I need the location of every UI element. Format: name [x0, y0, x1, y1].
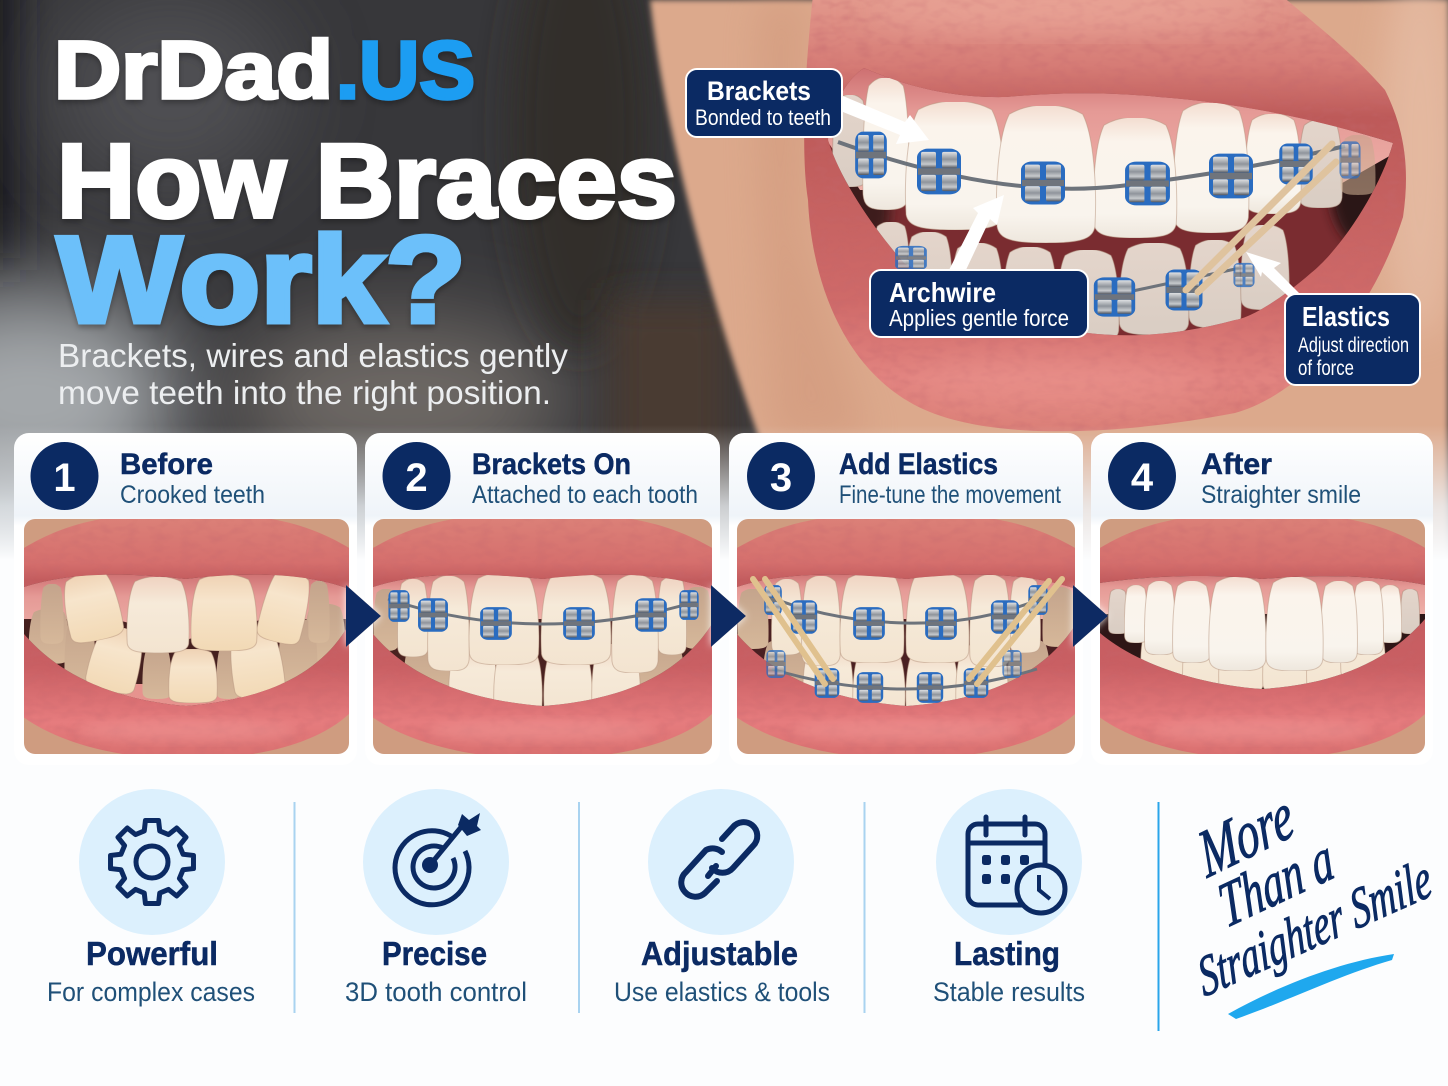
arrow: brackets pointer [843, 96, 929, 144]
photo: braces with elastics [732, 514, 1080, 759]
callout: Archwire: Applies gentle force [889, 305, 1069, 331]
arrow: step 2 to 3 [711, 585, 746, 647]
logo: DrDad.US: DrDad [54, 25, 333, 116]
step number 2: 2 [405, 456, 428, 500]
mouth opening [828, 68, 1393, 336]
step number 3: 3 [770, 456, 792, 500]
step description: Crooked teeth [120, 481, 265, 509]
lower brackets [895, 246, 927, 270]
callout: Elastics: Elastics [1302, 301, 1390, 332]
icon: chain link [648, 789, 794, 935]
feature: Precise [345, 789, 527, 1007]
callout: Elastics [1285, 294, 1420, 385]
panel: step 4 After [1091, 433, 1433, 765]
callout: Archwire [870, 270, 1088, 337]
panel: step 3 Add Elastics [729, 433, 1083, 765]
step description: Attached to each tooth [472, 481, 698, 509]
subtitle: Brackets, wires and elastics gently [58, 337, 568, 374]
dividers [294, 802, 1158, 1031]
photo: teeth with brackets [368, 514, 717, 759]
lips [804, 0, 1406, 431]
logo: DrDad.US [54, 25, 475, 116]
feature: Powerful [47, 789, 255, 1007]
arrow: archwire pointer [948, 195, 1004, 272]
step heading: After [1201, 448, 1272, 481]
icon: gear [79, 789, 225, 935]
feature title: Precise [382, 935, 487, 972]
arrow: step 3 to 4 [1073, 585, 1108, 647]
callout: Brackets: Bonded to teeth [695, 105, 831, 130]
logo: DrDad.US: .US [336, 25, 475, 116]
step number 2 [382, 442, 450, 510]
title: How Braces Work?: Work? [57, 212, 466, 349]
elastic bands [753, 579, 1062, 684]
slogan: More Than a Straighter Smile: More [1190, 778, 1301, 893]
upper teeth [863, 77, 909, 210]
subtitle [58, 337, 568, 411]
title: How Braces Work? [57, 123, 677, 349]
step description: Straighter smile [1201, 481, 1361, 509]
slogan: More Than a Straighter Smile: Than a [1211, 822, 1340, 942]
photo: straight smile [1095, 514, 1430, 759]
step number 4 [1108, 442, 1176, 510]
subtitle: move teeth into the right position. [58, 374, 551, 411]
step number 4: 4 [1131, 456, 1154, 500]
callout: Elastics: of force [1298, 357, 1354, 380]
arrow: elastics pointer [1246, 252, 1300, 296]
feature title: Adjustable [641, 935, 798, 972]
back upper teeth [833, 94, 867, 187]
hero photo: smile with braces and blurred background [0, 0, 1448, 560]
feature description: Stable results [933, 977, 1085, 1007]
icon: target [363, 789, 509, 935]
icon: calendar and clock [936, 789, 1082, 935]
archwire and brackets [388, 599, 698, 624]
fade from hero to page [0, 425, 1448, 560]
feature: Adjustable [614, 789, 830, 1007]
step number 1: 1 [53, 456, 76, 500]
step heading: Add Elastics [839, 448, 998, 481]
feature description: Use elastics & tools [614, 977, 830, 1007]
arrow: step 1 to 2 [346, 585, 381, 647]
title: How Braces Work?: How Braces [57, 123, 677, 240]
archwires and brackets [783, 600, 1028, 625]
step description: Fine-tune the movement [839, 481, 1061, 509]
feature description: 3D tooth control [345, 977, 527, 1007]
step heading: Brackets On [472, 448, 631, 481]
feature: Lasting [933, 789, 1085, 1007]
feature title: Powerful [86, 935, 218, 972]
lower teeth [876, 222, 909, 264]
upper brackets [855, 132, 887, 178]
callout: Brackets [686, 69, 842, 137]
photo: crooked teeth [19, 514, 354, 759]
step number 1 [30, 442, 98, 510]
archwire [838, 142, 1345, 189]
skin [650, 0, 1448, 560]
step heading: Before [120, 448, 213, 481]
panel: step 2 Brackets On [365, 433, 720, 765]
callout: Archwire: Archwire [889, 277, 996, 308]
feature description: For complex cases [47, 977, 255, 1007]
feature title: Lasting [954, 935, 1060, 972]
elastic band [1186, 144, 1336, 292]
underline brush stroke [1228, 954, 1394, 1019]
panel: step 1 Before [14, 433, 357, 765]
callout: Brackets: Brackets [707, 76, 811, 106]
callout: Elastics: Adjust direction [1298, 334, 1409, 357]
step number 3 [747, 442, 815, 510]
